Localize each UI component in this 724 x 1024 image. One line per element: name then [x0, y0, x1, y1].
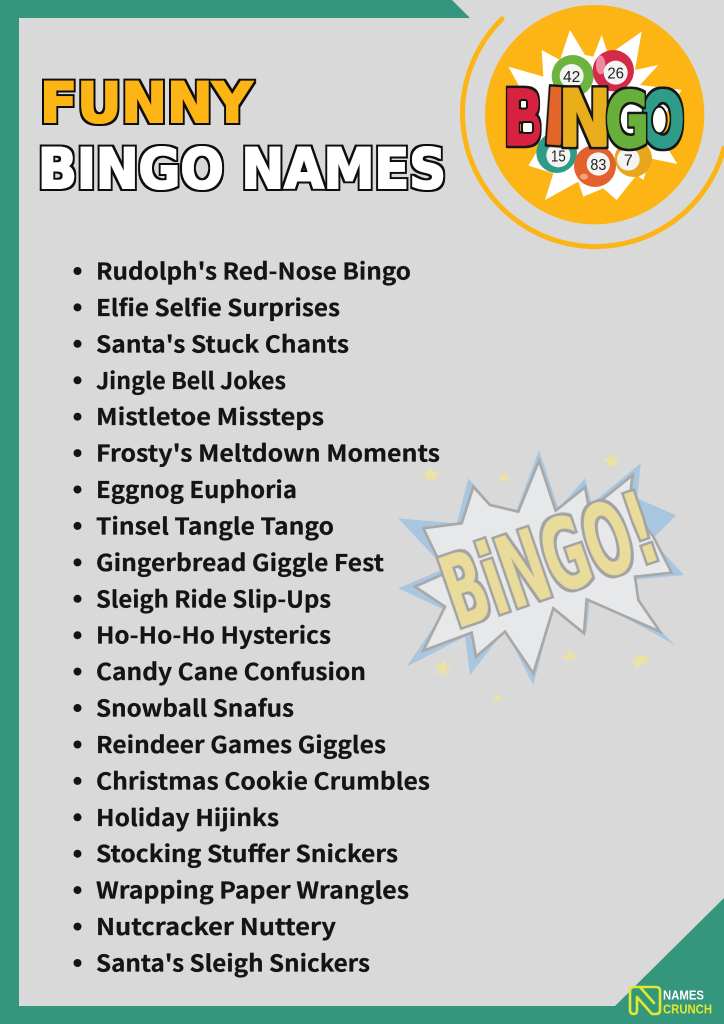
ball 7: 7: [624, 152, 633, 169]
list of bingo names: Jingle Bell Jokes: [96, 362, 286, 396]
ball 15: [536, 132, 577, 173]
list of bingo names: Candy Cane Confusion: [96, 653, 366, 687]
faded comic bingo burst: [398, 450, 684, 703]
bullets: [74, 267, 82, 967]
list of bingo names: Mistletoe Missteps: [96, 398, 324, 432]
ball 83: [574, 145, 616, 187]
logo word: bingo: G: [605, 77, 649, 165]
badge: bingo balls logo: [485, 5, 704, 224]
orange circle: [485, 5, 704, 224]
list of bingo names: [74, 252, 440, 978]
list of bingo names: Santa's Stuck Chants: [96, 325, 349, 359]
list of bingo names: Christmas Cookie Crumbles: [96, 762, 430, 796]
list of bingo names: Tinsel Tangle Tango: [96, 507, 334, 541]
title line: funny: FUNNY: [40, 71, 253, 135]
list of bingo names: Reindeer Games Giggles: [96, 726, 386, 760]
letter counters: [520, 100, 667, 133]
ball 42: 42: [563, 69, 580, 86]
list of bingo names: Wrapping Paper Wrangles: [96, 872, 409, 906]
list of bingo names: Snowball Snafus: [96, 690, 294, 724]
list of bingo names: Rudolph's Red-Nose Bingo: [96, 252, 411, 286]
logo word: bingo: [503, 73, 684, 165]
ball 15: 15: [551, 148, 566, 165]
list of bingo names: Holiday Hijinks: [96, 799, 279, 833]
ball 42: [552, 55, 594, 97]
list of bingo names: Eggnog Euphoria: [96, 471, 297, 505]
wordmark: crunch: CRUNCH: [663, 1002, 712, 1016]
list of bingo names: Elfie Selfie Surprises: [96, 289, 340, 323]
logo word: bingo: N: [558, 73, 611, 164]
title: [38, 71, 446, 201]
pale burst centre: [415, 461, 672, 673]
icon: orange arc ring: [463, 19, 724, 247]
logo word: bingo: O: [641, 77, 684, 165]
ball 7: [615, 140, 652, 177]
wordmark: names: NAMES: [663, 988, 704, 1002]
list of bingo names: Santa's Sleigh Snickers: [96, 944, 370, 978]
names crunch logo: [630, 987, 712, 1016]
logo word: bingo: B: [503, 75, 543, 163]
white starburst: [508, 30, 682, 200]
ball 83: 83: [590, 157, 606, 174]
pale stars: [419, 451, 655, 703]
blue burst: [398, 450, 684, 685]
list of bingo names: Sleigh Ride Slip-Ups: [96, 580, 331, 614]
title line: bingo names: BINGO NAMES: [38, 137, 446, 201]
icon: n mark: [630, 987, 660, 1014]
list of bingo names: Stocking Stuffer Snickers: [96, 835, 398, 869]
ball 26: 26: [607, 66, 624, 83]
list of bingo names: Gingerbread Giggle Fest: [96, 544, 384, 578]
ball 26: [593, 50, 634, 91]
list of bingo names: Nutcracker Nuttery: [96, 908, 336, 942]
list of bingo names: Frosty's Meltdown Moments: [96, 435, 440, 469]
list of bingo names: Ho-Ho-Ho Hysterics: [96, 617, 331, 651]
logo word: bingo: I: [541, 73, 570, 163]
